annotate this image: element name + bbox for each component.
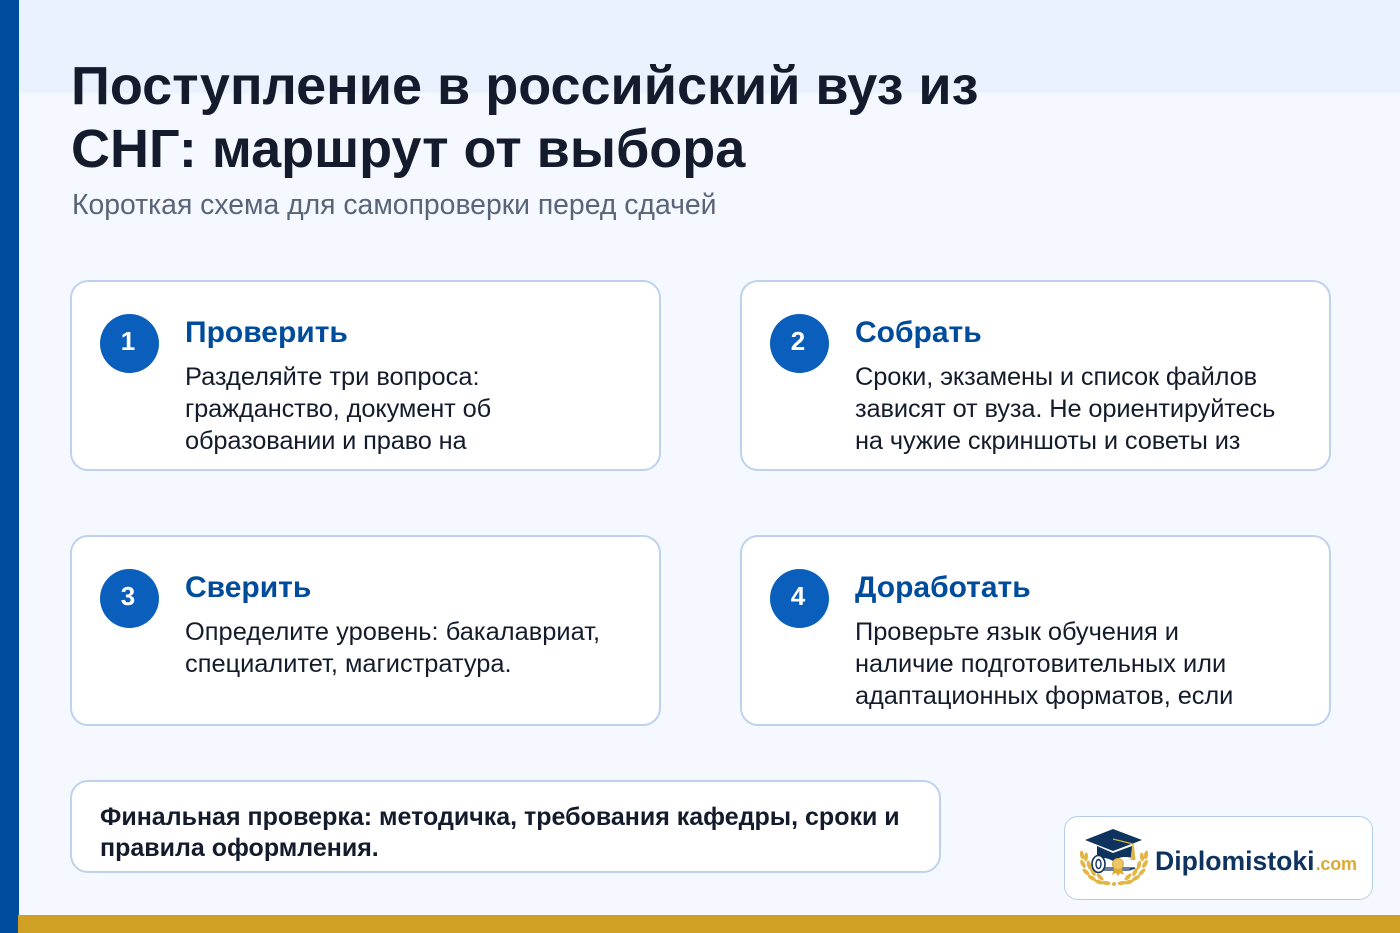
step 4 text: адаптационных форматов, если — [855, 682, 1233, 710]
step 2 heading: Собрать — [855, 316, 982, 349]
step 2 text: Сроки, экзамены и список файлов — [855, 363, 1257, 391]
step number 1 — [100, 314, 159, 373]
title: Поступление в российский вуз из — [71, 56, 978, 116]
callout text — [100, 803, 900, 862]
top band — [19, 0, 1400, 93]
step number 4: 4 — [791, 581, 805, 611]
step number 3: 3 — [121, 581, 135, 611]
logo wordmark: Diplomistoki.com — [1155, 846, 1357, 876]
step 1 text: образовании и право на — [185, 427, 467, 455]
panel: step 4 — [740, 535, 1331, 726]
panel: step 3 — [70, 535, 661, 726]
step 4 text — [855, 618, 1233, 710]
step 1 text — [185, 363, 491, 455]
step 4 text: наличие подготовительных или — [855, 650, 1226, 678]
step number 4 — [770, 569, 829, 628]
callout: final check — [70, 780, 941, 873]
step number 3 — [100, 569, 159, 628]
left accent bar — [0, 0, 19, 933]
step number 2 — [770, 314, 829, 373]
icon: graduation cap with laurel — [1080, 829, 1148, 886]
callout text: Финальная проверка: методичка, требования кафедры, сроки и — [100, 803, 900, 831]
step 2 text: зависят от вуза. Не ориентируйтесь — [855, 395, 1275, 423]
panel: step 2 — [740, 280, 1331, 471]
subtitle: Короткая схема для самопроверки перед сдачей — [72, 189, 716, 221]
step 2 text — [855, 363, 1275, 455]
title — [71, 56, 978, 179]
step number 2: 2 — [791, 326, 805, 356]
step 1 text: Разделяйте три вопроса: — [185, 363, 480, 391]
step 3 text: Определите уровень: бакалавриат, — [185, 618, 600, 646]
callout text: правила оформления. — [100, 834, 379, 862]
bottom accent bar — [18, 915, 1400, 933]
step 1 text: гражданство, документ об — [185, 395, 491, 423]
step 3 heading: Сверить — [185, 571, 311, 604]
step 3 text — [185, 618, 600, 678]
step 4 text: Проверьте язык обучения и — [855, 618, 1179, 646]
panel: step 1 — [70, 280, 661, 471]
step 3 text: специалитет, магистратура. — [185, 650, 512, 678]
logo card — [1064, 816, 1373, 900]
step 2 text: на чужие скриншоты и советы из — [855, 427, 1240, 455]
step 4 heading: Доработать — [855, 571, 1031, 604]
title: СНГ: маршрут от выбора — [71, 119, 745, 179]
step number 1: 1 — [121, 326, 135, 356]
step 1 heading: Проверить — [185, 316, 348, 349]
